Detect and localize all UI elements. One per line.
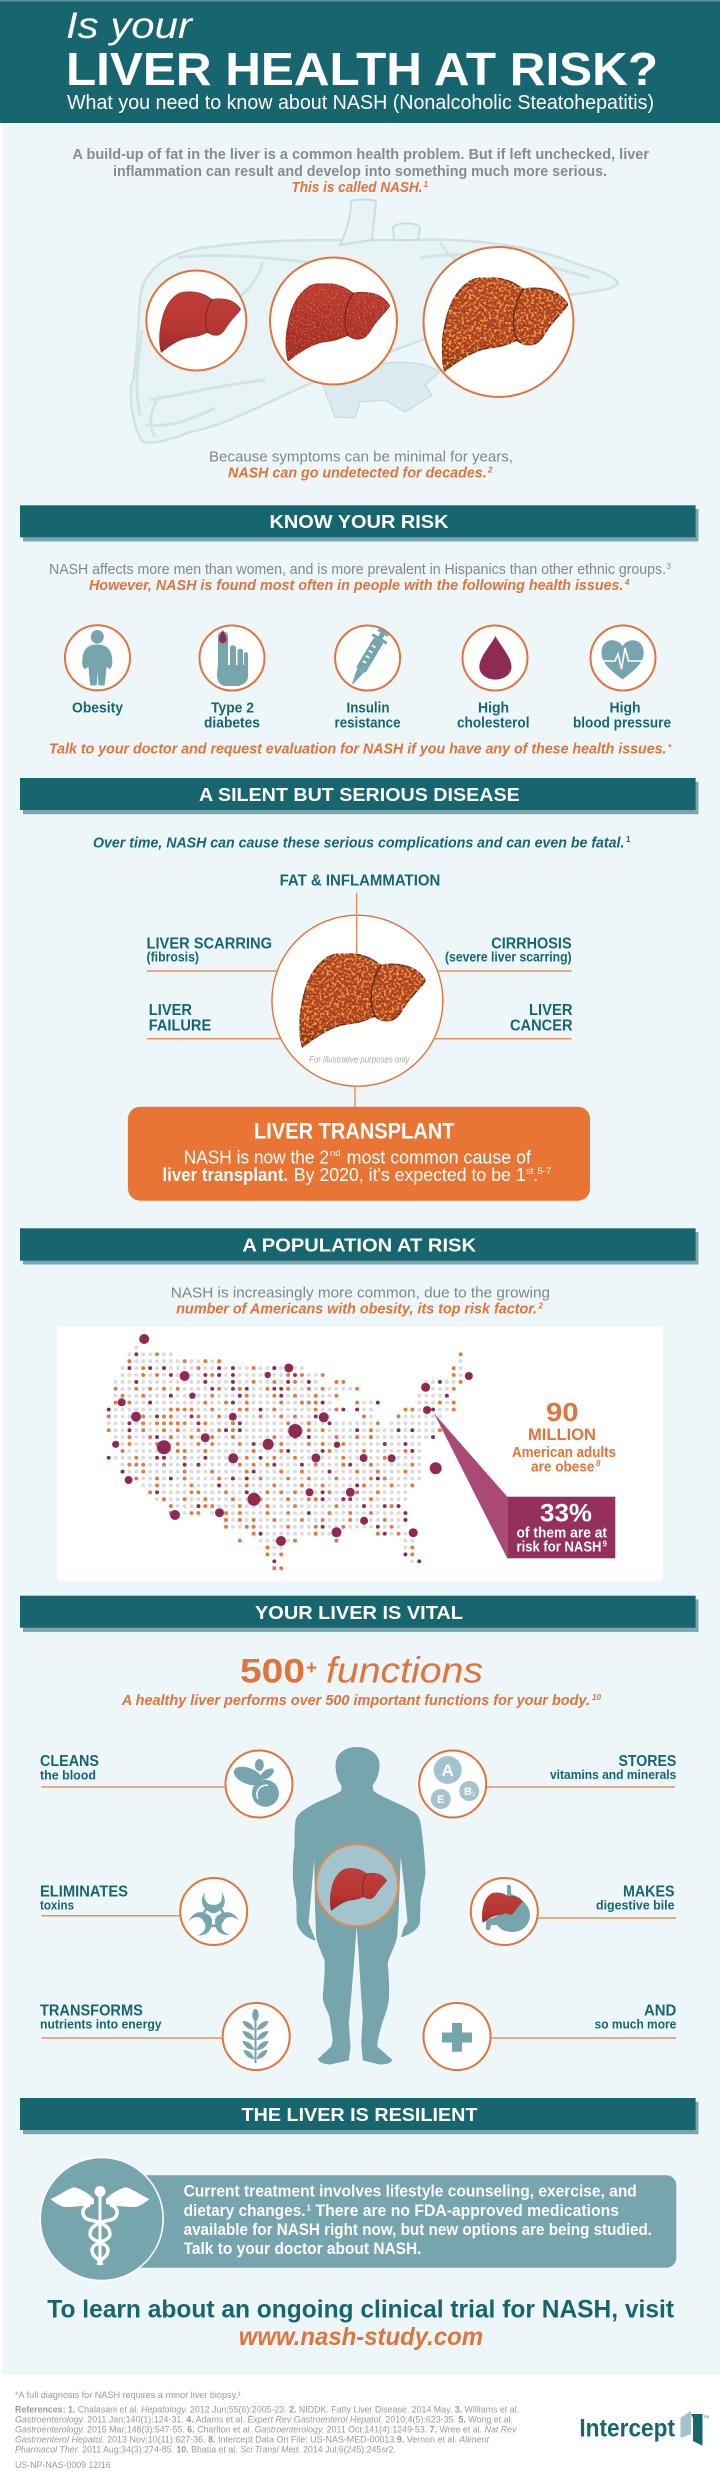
callout: liver transplant: LIVER TRANSPLANT xyxy=(254,1119,455,1144)
section heading: silent disease xyxy=(20,778,698,814)
cirrhotic liver xyxy=(300,954,425,1047)
NASH liver xyxy=(424,247,574,397)
severe scarring note: (severe liver scarring) xyxy=(445,949,572,964)
section heading: population at risk: A POPULATION AT RISK xyxy=(242,1236,476,1256)
functions subtitle: 10 xyxy=(592,1693,601,1702)
callout: 33 percent: risk for NASH xyxy=(516,1540,602,1556)
function: transforms nutrients: nutrients into energy xyxy=(40,2017,162,2032)
fatty liver xyxy=(270,258,397,384)
risk labels: High xyxy=(478,701,509,717)
dot map of USA xyxy=(109,1334,473,1568)
function: eliminates toxins: ELIMINATES xyxy=(40,1883,128,1900)
icon: insulin syringe xyxy=(306,597,429,719)
complications diagram xyxy=(146,872,573,1107)
500+ functions heading xyxy=(240,1649,483,1690)
section heading: your liver is vital xyxy=(20,1596,698,1632)
stat: 90 million: MILLION xyxy=(528,1425,596,1444)
healthy liver xyxy=(146,270,246,370)
500+ functions heading: 500 xyxy=(240,1652,305,1690)
risk labels: blood pressure xyxy=(573,716,671,732)
treatment text: available for NASH right now, but new options are being studied. xyxy=(184,2221,652,2239)
icon: vitamins: 1 xyxy=(472,1792,476,1798)
treatment text: Talk to your doctor about NASH. xyxy=(184,2240,422,2258)
section heading: silent disease: A SILENT BUT SERIOUS DISEASE xyxy=(199,785,520,805)
icon: vitamins xyxy=(419,1750,486,1818)
section heading: population at risk xyxy=(20,1228,698,1264)
subtitle: What you need to know about NASH (Nonalcoholic Steatohepatitis) xyxy=(67,92,654,114)
undetected text xyxy=(209,449,513,482)
icon: vitamins: E xyxy=(437,1794,444,1806)
population intro: NASH is increasingly more common, due to the growing xyxy=(171,1284,550,1301)
icon: plus xyxy=(424,2003,490,2070)
body liver xyxy=(330,1868,387,1911)
population intro: 2 xyxy=(538,1302,544,1310)
callout: 33 percent: of them are at xyxy=(516,1525,607,1541)
icon: liver and stomach xyxy=(471,1878,538,1945)
intro text: This is called NASH. xyxy=(292,179,422,196)
stage: liver failure: LIVER xyxy=(149,1002,192,1019)
function: stores vitamins: vitamins and minerals xyxy=(550,1767,676,1782)
callout: liver transplant: 5-7 xyxy=(538,1166,551,1177)
icon: vitamins: A xyxy=(442,1761,454,1780)
callout: liver transplant: . xyxy=(533,1164,538,1185)
500+ functions heading: + xyxy=(306,1658,317,1679)
call to action: To learn about an ongoing clinical trial for NASH, visit xyxy=(47,2295,675,2323)
function: cleans the blood: CLEANS xyxy=(40,1753,99,1770)
undetected text: NASH can go undetected for decades. xyxy=(228,465,487,482)
complications intro: 1 xyxy=(626,835,631,844)
risk intro text xyxy=(49,561,672,594)
500+ functions heading: functions xyxy=(326,1649,483,1690)
section heading: know your risk xyxy=(20,505,698,542)
function: makes digestive bile xyxy=(471,1878,674,1945)
disclaimer: For illustrative purposes only xyxy=(309,1055,411,1066)
stage: liver failure xyxy=(149,1002,211,1035)
icon: obesity xyxy=(65,625,130,690)
illustration: anatomical liver backdrop xyxy=(131,200,618,443)
intro text: 1 xyxy=(424,180,428,189)
function: makes digestive bile: MAKES xyxy=(623,1883,674,1900)
function: eliminates toxins xyxy=(40,1878,247,1945)
icon: blood pressure heart xyxy=(590,626,656,690)
intro text: inflammation can result and develop into something much more serious. xyxy=(113,163,607,180)
stage: liver cancer xyxy=(510,1002,573,1035)
risk labels: diabetes xyxy=(204,716,260,732)
risk intro text: 4 xyxy=(624,578,630,587)
header banner xyxy=(0,0,720,123)
footnotes and references xyxy=(15,2390,519,2471)
function: and so much more: so much more xyxy=(595,2017,676,2032)
icon: type 2 diabetes xyxy=(200,626,264,690)
stat: 90 million xyxy=(512,1397,616,1475)
risk labels: Insulin xyxy=(346,701,390,717)
call to action: www.nash-study.com xyxy=(239,2323,483,2351)
evaluation note: Talk to your doctor and request evaluation for NASH if you have any of these health issues. xyxy=(49,740,666,757)
stat: 90 million: 8 xyxy=(596,1459,601,1468)
risk labels: Type 2 xyxy=(211,701,254,717)
footnotes and references: US-NP-NAS-0009 12/16 xyxy=(15,2460,111,2471)
treatment text: There are no FDA-approved medications xyxy=(316,2202,619,2220)
treatment panel xyxy=(40,2158,676,2280)
function: cleans the blood: the blood xyxy=(40,1767,96,1782)
callout: liver transplant: nd xyxy=(330,1148,341,1159)
call to action xyxy=(47,2295,675,2351)
treatment text: dietary changes. xyxy=(184,2202,306,2220)
stage: liver cancer: CANCER xyxy=(510,1018,573,1035)
icon: blood cells xyxy=(226,1750,292,1818)
evaluation note: * xyxy=(668,743,672,752)
big liver circle xyxy=(272,915,443,1086)
complications intro: Over time, NASH can cause these serious complications and can even be fatal. xyxy=(93,834,624,851)
section heading: your liver is vital: YOUR LIVER IS VITAL xyxy=(255,1603,463,1623)
icon: biohazard xyxy=(180,1878,247,1945)
section heading: liver is resilient: THE LIVER IS RESILIENT xyxy=(242,2105,478,2125)
risk labels: cholesterol xyxy=(457,716,530,732)
function connector lines xyxy=(41,1787,676,2038)
footnotes and references: *A full diagnosis for NASH requires a minor liver biopsy.¹ xyxy=(15,2390,241,2401)
undetected text: Because symptoms can be minimal for years, xyxy=(209,449,513,466)
connector lines xyxy=(147,893,572,1107)
title: Is your: Is your xyxy=(66,5,194,46)
callout: liver transplant: NASH is now the 2 xyxy=(184,1146,329,1167)
footnotes and references: Gastroenterology. 2015 Mar;148(3):547-55. 6. Charlton et al. Gastroenterology. 2011 Oct;141(4):1249-53. 7. Wree et al. Nat Rev xyxy=(15,2424,518,2435)
footnotes and references: Pharmacol Ther. 2011 Aug;34(3):274-85. 10. Bhatia et al. Sci Transl Med. 2014 Jul;6(245):245sr2. xyxy=(15,2444,396,2455)
Intercept logo: TM xyxy=(703,2414,709,2419)
stat: 90 million: American adults xyxy=(512,1444,616,1461)
callout: liver transplant: st xyxy=(526,1166,534,1177)
functions subtitle: A healthy liver performs over 500 important functions for your body. xyxy=(121,1692,590,1709)
footnotes and references: Gastroenterology. 2011 Jan;140(1):124-31. 4. Adams et al. Expert Rev Gastroenterol Hepatol. 2010;4(5):623-35. 5. Wong et al. xyxy=(15,2414,513,2425)
stat: 90 million: 90 xyxy=(546,1397,578,1427)
treatment text: Current treatment involves lifestyle counseling, exercise, and xyxy=(184,2183,637,2201)
population intro xyxy=(171,1284,550,1318)
stage: liver cancer: LIVER xyxy=(529,1002,573,1019)
callout: liver transplant: liver transplant. xyxy=(162,1164,288,1185)
section heading: know your risk: KNOW YOUR RISK xyxy=(270,512,448,532)
icon: wheat xyxy=(223,2003,290,2070)
footnotes and references: References: 1. Chalasani et al. Hepatology. 2012 Jun;55(6):2005-23. 2. NIDDK. Fatty Liver Disease. 2014 May. 3. Williams et al. xyxy=(15,2404,519,2415)
title: liver health at risk: LIVER HEALTH AT RISK? xyxy=(66,43,658,95)
callout: 33 percent xyxy=(434,1413,615,1558)
function: stores vitamins: STORES xyxy=(618,1753,676,1770)
callout: 33 percent: 9 xyxy=(602,1540,608,1548)
intro text xyxy=(72,146,649,196)
function: transforms nutrients xyxy=(40,2003,290,2070)
Intercept logo: Intercept xyxy=(579,2415,676,2443)
section heading: liver is resilient xyxy=(20,2098,698,2134)
risk labels: resistance xyxy=(334,716,400,732)
body silhouette xyxy=(293,1748,425,2064)
stage: liver scarring: LIVER SCARRING xyxy=(146,935,272,952)
risk labels xyxy=(72,701,671,732)
caduceus badge xyxy=(40,2158,163,2280)
intro text: A build-up of fat in the liver is a common health problem. But if left unchecked, liver xyxy=(72,146,649,163)
function: stores vitamins xyxy=(419,1750,676,1818)
treatment text xyxy=(184,2183,652,2258)
function: and so much more: AND xyxy=(644,2003,676,2020)
stage: liver failure: FAILURE xyxy=(149,1018,211,1035)
population intro: number of Americans with obesity, its top risk factor. xyxy=(176,1301,537,1318)
icon: cholesterol drop xyxy=(462,626,528,690)
callout: liver transplant: most common cause of xyxy=(347,1146,532,1167)
fibrosis note: (fibrosis) xyxy=(146,949,199,964)
stat: 90 million: are obese xyxy=(531,1458,594,1475)
undetected text: 2 xyxy=(487,466,493,474)
icon: vitamins: B xyxy=(464,1786,472,1798)
risk labels: High xyxy=(610,701,640,717)
function: makes digestive bile: digestive bile xyxy=(596,1897,674,1912)
callout: 33 percent: 33% xyxy=(540,1500,592,1528)
footnotes and references: Gastroenterol Hepatol. 2013 Nov;10(11):627-36. 8. Intercept Data On File: US-NAS-MED-00013 9. Vernon et al. Aliment xyxy=(15,2434,489,2445)
map panel xyxy=(57,1327,663,1581)
risk intro text: However, NASH is found most often in people with the following health issues. xyxy=(89,577,624,594)
callout: liver transplant: By 2020, it's expected to be 1 xyxy=(294,1164,526,1185)
stage: fat and inflammation: FAT & INFLAMMATION xyxy=(280,872,440,889)
Intercept logo xyxy=(579,2411,709,2446)
risk intro text: NASH affects more men than women, and is more prevalent in Hispanics than other ethnic groups. xyxy=(49,561,666,578)
risk labels: Obesity xyxy=(72,701,123,717)
risk intro text: 3 xyxy=(666,562,672,571)
function: eliminates toxins: toxins xyxy=(40,1897,74,1912)
callout: liver transplant xyxy=(128,1107,590,1201)
treatment text: 1 xyxy=(306,2204,312,2212)
body liver circle xyxy=(316,1844,398,1926)
function: and so much more xyxy=(424,2003,676,2070)
stage: cirrhosis: CIRRHOSIS xyxy=(491,935,572,952)
function: cleans the blood xyxy=(40,1750,292,1818)
function: transforms nutrients: TRANSFORMS xyxy=(40,2003,143,2020)
